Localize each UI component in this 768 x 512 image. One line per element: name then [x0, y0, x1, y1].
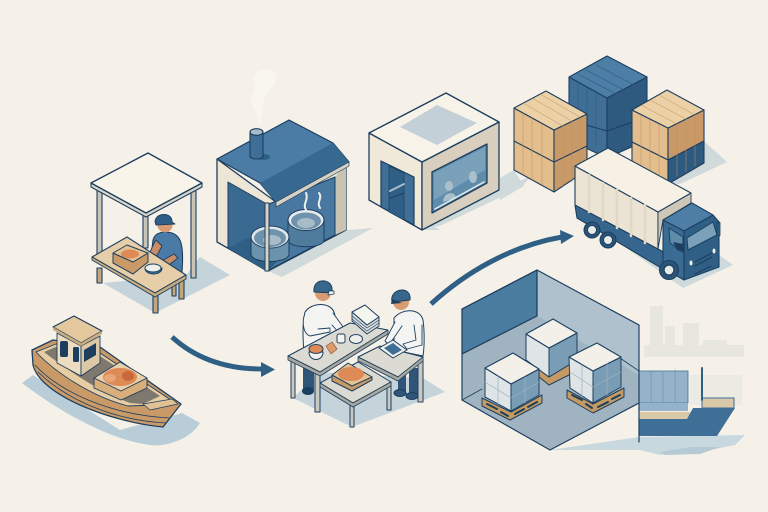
cup — [337, 334, 345, 343]
arrow: processing to truck — [431, 230, 574, 304]
paper stack — [352, 305, 379, 334]
boat cabin — [53, 316, 102, 376]
smokehouse roof — [217, 120, 349, 207]
truck chassis and wheels — [575, 205, 675, 272]
right worker — [385, 290, 424, 400]
back pot — [288, 193, 324, 247]
left container stack — [514, 91, 587, 192]
white bowl — [350, 334, 362, 344]
smoke plume — [251, 70, 276, 123]
front pot — [251, 226, 289, 262]
crate of fish on the stall — [113, 245, 148, 274]
truck cab — [660, 203, 720, 280]
city skyline in haze — [644, 306, 744, 405]
right table — [358, 346, 423, 402]
chimney — [250, 129, 270, 160]
bowl on stall — [145, 268, 162, 274]
truck cargo box — [575, 148, 691, 249]
pallet stack left — [482, 353, 542, 420]
pallet stack back — [526, 319, 577, 385]
rooftop panel — [400, 105, 477, 145]
cargo ship — [550, 368, 745, 455]
blue container stack — [569, 56, 647, 158]
tablet — [379, 340, 407, 358]
bowl with fish — [309, 344, 323, 360]
refrigerated warehouse — [462, 270, 639, 450]
left worker — [302, 281, 346, 395]
window with silhouettes — [432, 144, 487, 213]
boat crate of catch — [94, 362, 147, 400]
vendor figure — [148, 214, 183, 272]
fish fillet — [326, 342, 337, 354]
lower table — [320, 362, 391, 427]
left table — [288, 323, 388, 412]
crate on lower table — [332, 363, 372, 391]
right container stack — [632, 90, 704, 184]
stall with vendor — [91, 153, 230, 313]
processing tables with workers — [288, 281, 445, 427]
stacked containers — [500, 56, 727, 200]
pallet stack right — [567, 343, 624, 413]
storage building — [369, 93, 531, 230]
smokehouse — [217, 70, 373, 277]
arrow: boat to processing — [172, 337, 275, 377]
fishing boat — [22, 316, 200, 445]
doorway — [381, 161, 414, 225]
delivery truck — [575, 148, 733, 288]
